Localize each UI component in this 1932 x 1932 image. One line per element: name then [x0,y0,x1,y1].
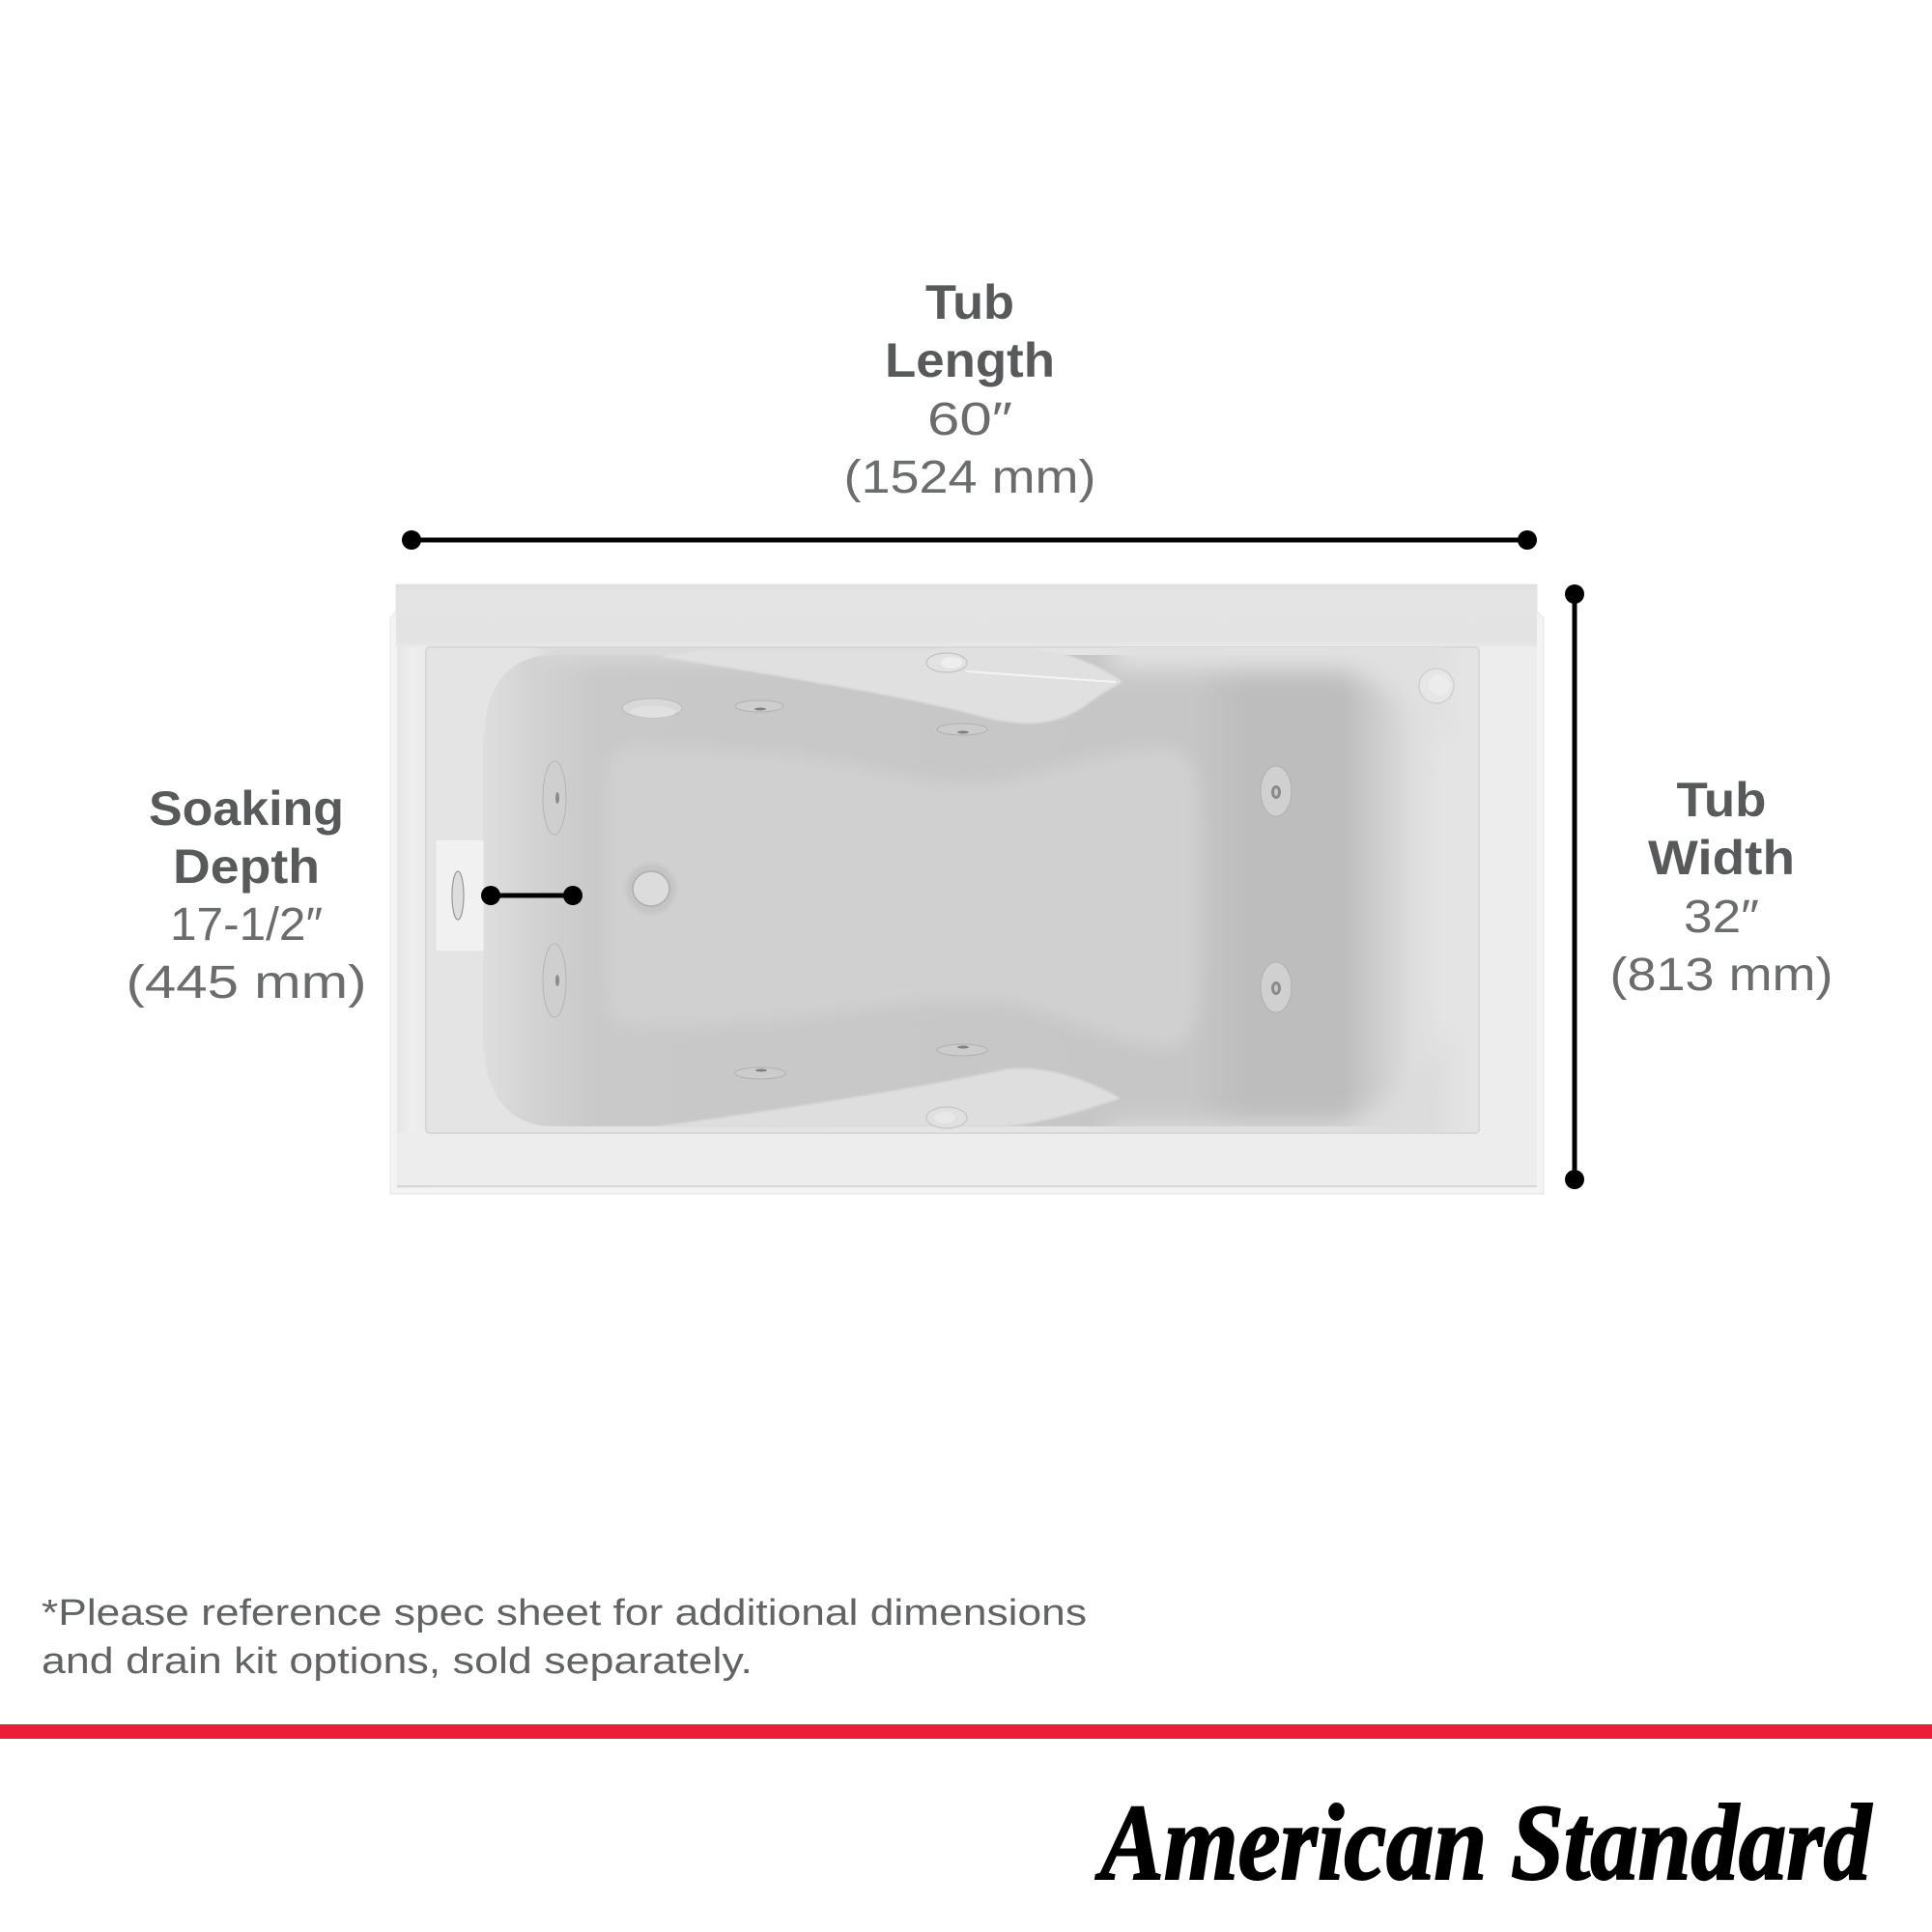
tub length label: Length [885,333,1055,387]
air control top [926,653,967,672]
tub length label: (1524 mm) [844,452,1095,503]
basin shell [483,655,1439,1126]
tub width label: Tub [1677,773,1766,827]
overflow plate [436,839,484,952]
footnote: and drain kit options, sold separately. [42,1641,753,1682]
tub width dimension line [1565,584,1584,1189]
top right fade above wall [1107,655,1401,688]
soaking depth label: Depth [173,839,320,894]
top armrest ledge [658,649,1122,724]
jet: top small 1 [735,700,783,712]
red divider band [0,1724,1932,1739]
deck recess [426,647,1479,1133]
soaking depth label: (445 mm) [126,957,367,1009]
tub length label [844,275,1095,503]
bottom armrest ledge [650,1068,1121,1127]
outer tub shell [390,584,1544,1194]
tub illustration [390,584,1544,1194]
tub length label: Tub [925,275,1014,329]
tub width label: (813 mm) [1609,950,1833,1001]
jet: left upper [543,761,566,835]
tub width label: Width [1648,831,1795,885]
top armrest highlight [966,671,1116,682]
deck plug [1419,668,1454,703]
tub width label: 32″ [1684,892,1759,943]
tub length dimension line [402,530,1537,550]
soaking depth label: Soaking [149,781,344,836]
jet: left lower [543,944,566,1017]
right flange [1479,638,1537,1187]
soaking depth label [126,781,367,1009]
soaking depth label: 17-1/2″ [170,899,323,951]
jet: bottom small 1 [937,1044,987,1056]
left flange [397,611,426,1188]
basin [493,648,1430,1126]
air control bottom [926,1107,967,1128]
jet: bottom small 2 [735,1067,785,1079]
soaking depth dimension line [481,886,582,905]
jet: right lower [1261,962,1292,1012]
basin floor [798,755,1194,1040]
jet: top small 2 [937,724,987,735]
footnote [42,1593,1087,1682]
jet: right upper [1261,766,1292,816]
drain [626,864,676,914]
tub length label: 60″ [927,394,1012,445]
bottom flange [397,1133,1537,1186]
top left rim softening [547,648,710,661]
tub width label [1609,773,1833,1001]
bottom edge line [397,1185,1537,1187]
footnote: *Please reference spec sheet for additional dimensions [42,1593,1087,1634]
jet: large top left [622,698,682,718]
top rim band [396,584,1537,647]
bottom right fade [1116,1108,1393,1126]
